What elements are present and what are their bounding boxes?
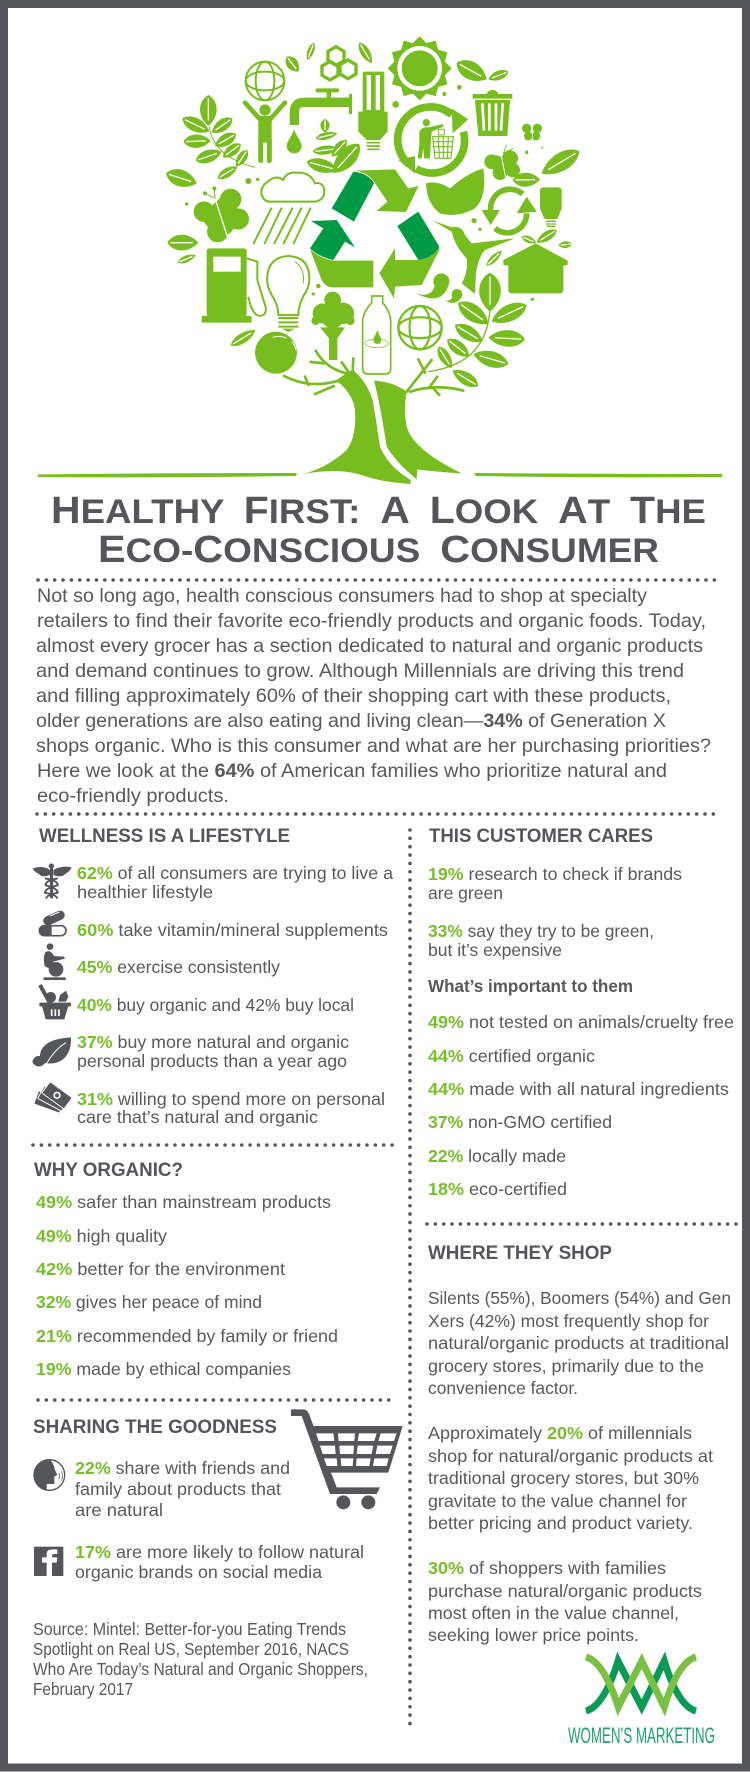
shop paragraph 1: Silents (55%), Boomers (54%) and Gen <box>428 1288 731 1308</box>
heading: SHARING THE GOODNESS <box>33 1417 277 1438</box>
shop paragraph 2 <box>428 1423 713 1533</box>
shop paragraph 1: grocery stores, primarily due to the <box>428 1356 704 1376</box>
wellness list <box>77 863 393 1127</box>
icon: small tree <box>311 292 355 360</box>
divider <box>33 1143 395 1147</box>
sharing text: 17% are more likely to follow natural <box>75 1542 364 1562</box>
divider <box>37 812 720 816</box>
icon: recycling symbol <box>310 169 439 298</box>
icon: exercise bike <box>43 943 66 980</box>
source note: Who Are Today’s Natural and Organic Shoppers, <box>33 1659 368 1679</box>
intro paragraph: and demand continues to grow. Although Millennials are driving this trend <box>36 660 684 682</box>
panel: this customer cares <box>428 826 734 1199</box>
icon: trash can <box>473 90 512 136</box>
wellness list: 60% take vitamin/mineral supplements <box>77 920 388 940</box>
icon: small recycle arrows <box>482 189 537 233</box>
shop paragraph 3 <box>428 1558 702 1645</box>
title <box>51 490 706 571</box>
icon: compact light bulb <box>358 72 388 149</box>
priorities list: 49% not tested on animals/cruelty free <box>428 1012 734 1032</box>
shop paragraph 3: 30% of shoppers with families <box>428 1558 666 1578</box>
sharing text: are natural <box>75 1500 163 1520</box>
sharing text <box>75 1458 364 1582</box>
shop paragraph 1: natural/organic products at traditional <box>428 1333 729 1353</box>
wellness list: personal products than a year ago <box>77 1051 347 1071</box>
sharing text: organic brands on social media <box>75 1562 322 1582</box>
icon: faucet and drop <box>287 88 352 153</box>
organic list: 49% high quality <box>36 1226 167 1246</box>
priorities list <box>428 1012 734 1199</box>
icon: water bottle <box>363 296 391 374</box>
cares text: 19% research to check if brands <box>428 864 682 884</box>
heading: THIS CUSTOMER CARES <box>429 826 653 847</box>
tree crown icons <box>163 36 584 301</box>
leaves <box>163 40 584 268</box>
panel: why organic <box>34 1160 338 1379</box>
icon: shopping cart <box>291 1409 403 1509</box>
organic list <box>36 1192 338 1379</box>
logo: women's marketing <box>568 1657 715 1748</box>
icon: split leaf <box>426 168 484 215</box>
source note: Source: Mintel: Better-for-you Eating Trends <box>33 1619 346 1639</box>
panel: sharing the goodness <box>33 1409 403 1582</box>
icon: leaf <box>32 1037 71 1068</box>
icon: recycling bin ring <box>398 107 468 173</box>
shop paragraph 2: shop for natural/organic products at <box>428 1446 713 1466</box>
sharing text: 22% share with friends and <box>75 1458 290 1478</box>
intro paragraph: older generations are also eating and living clean—34% of Generation X <box>36 710 666 732</box>
organic list: 21% recommended by family or friend <box>36 1326 338 1346</box>
organic list: 49% safer than mainstream products <box>36 1192 331 1212</box>
icon: caduceus <box>33 863 72 899</box>
shop paragraph 1: Xers (42%) most frequently shop for <box>428 1311 709 1331</box>
icon: speaking head <box>34 1460 65 1490</box>
sharing text: family about products that <box>75 1479 281 1499</box>
intro paragraph: eco-friendly products. <box>37 785 229 807</box>
icon: commas <box>416 273 462 303</box>
sharing icons <box>34 1409 403 1576</box>
shop paragraph 3: most often in the value channel, <box>428 1603 679 1623</box>
icon: ball <box>255 332 297 374</box>
icon: globe and person <box>245 62 285 161</box>
divider <box>427 1222 738 1226</box>
shop paragraph 2: Approximately 20% of millennials <box>428 1423 692 1443</box>
cares text <box>428 864 682 960</box>
shop paragraph 1: convenience factor. <box>428 1378 578 1398</box>
icon: large butterfly <box>194 186 249 242</box>
source note <box>33 1619 368 1699</box>
intro paragraph: and filling approximately 60% of their shopping cart with these products, <box>36 685 671 707</box>
icon: facebook <box>34 1547 63 1576</box>
shop paragraph 2: gravitate to the value channel for <box>428 1491 687 1511</box>
icon: pills <box>39 909 66 936</box>
icon: hexagons <box>322 47 356 80</box>
icon: sun <box>388 36 452 100</box>
wellness list: 37% buy more natural and organic <box>77 1032 349 1052</box>
divider <box>38 1398 395 1402</box>
shop paragraph 2: better pricing and product variety. <box>428 1513 693 1533</box>
cares text: are green <box>428 883 503 903</box>
illustration: tree of eco icons <box>38 36 722 484</box>
shop paragraph 3: purchase natural/organic products <box>428 1581 702 1601</box>
heading: WHERE THEY SHOP <box>428 1243 612 1264</box>
priorities list: 44% certified organic <box>428 1046 595 1066</box>
icon: house <box>503 243 568 293</box>
icon: medium butterfly <box>484 145 520 180</box>
icon: small butterfly <box>522 124 542 141</box>
dots <box>185 85 543 301</box>
tree trunk <box>284 351 463 484</box>
wellness icons <box>32 863 72 1113</box>
shop paragraph 1 <box>428 1288 731 1398</box>
priorities list: 37% non-GMO certified <box>428 1112 612 1132</box>
panel: wellness is a lifestyle <box>32 826 393 1127</box>
shop paragraph 2: traditional grocery stores, but 30% <box>428 1468 699 1488</box>
icon: hummingbird <box>433 221 515 294</box>
icon: rain cloud <box>253 173 324 244</box>
ground lines <box>38 473 722 477</box>
intro paragraph: shops organic. Who is this consumer and what are her purchasing priorities? <box>36 735 711 757</box>
icon: gas pump <box>202 248 266 323</box>
intro paragraph <box>36 585 711 807</box>
heading: WHY ORGANIC? <box>34 1160 183 1181</box>
wellness list: 45% exercise consistently <box>77 957 280 977</box>
intro paragraph: Not so long ago, health conscious consumers had to shop at specialty <box>37 585 647 607</box>
column divider <box>408 830 412 1731</box>
wellness list: 40% buy organic and 42% buy local <box>77 995 354 1015</box>
priorities list: 18% eco-certified <box>428 1179 567 1199</box>
wellness list: 31% willing to spend more on personal <box>77 1089 385 1109</box>
organic list: 42% better for the environment <box>36 1259 285 1279</box>
divider <box>38 578 722 582</box>
icon: grocery basket <box>39 985 71 1019</box>
lower right branch leaves <box>228 273 530 391</box>
title: ECO-CONSCIOUS CONSUMER <box>98 529 659 571</box>
tree trunk and lower icons <box>202 248 530 484</box>
cares text: but it’s expensive <box>428 940 562 960</box>
wellness list: healthier lifestyle <box>77 882 213 902</box>
icon: money <box>34 1082 72 1113</box>
cares text: 33% say they try to be green, <box>428 921 654 941</box>
organic list: 19% made by ethical companies <box>36 1359 291 1379</box>
wellness list: care that’s natural and organic <box>77 1107 318 1127</box>
intro paragraph: Here we look at the 64% of American families who prioritize natural and <box>37 760 667 782</box>
logo mark <box>586 1657 696 1711</box>
source note: February 2017 <box>33 1679 133 1699</box>
source note: Spotlight on Real US, September 2016, NACS <box>33 1639 349 1659</box>
intro paragraph: retailers to find their favorite eco-friendly products and organic foods. Today, <box>37 610 706 632</box>
wellness list: 62% of all consumers are trying to live a <box>77 863 393 883</box>
subheading: What’s important to them <box>428 976 633 996</box>
title: HEALTHY FIRST: A LOOK AT THE <box>51 490 706 532</box>
priorities list: 44% made with all natural ingredients <box>428 1079 729 1099</box>
shop paragraph 3: seeking lower price points. <box>428 1625 639 1645</box>
icon: light bulb <box>267 256 309 332</box>
icon: right bulb <box>540 187 562 226</box>
heading: WELLNESS IS A LIFESTYLE <box>39 826 290 847</box>
panel: where they shop <box>428 1243 731 1645</box>
icon: globe <box>398 306 442 349</box>
organic list: 32% gives her peace of mind <box>36 1292 262 1312</box>
priorities list: 22% locally made <box>428 1146 566 1166</box>
intro paragraph: almost every grocer has a section dedicated to natural and organic products <box>36 635 703 657</box>
